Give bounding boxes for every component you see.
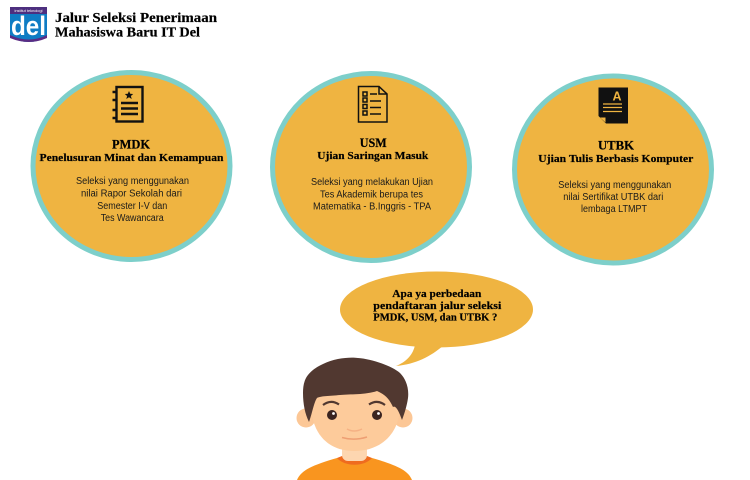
- heading: UTBK: UTBK: [598, 138, 634, 152]
- text: question: pendaftaran jalur seleksi: [373, 300, 501, 312]
- heading: PMDK: PMDK: [112, 138, 150, 152]
- text: UTBK description: lembaga LTMPT: [581, 204, 647, 215]
- subheading: PMDK: Penelusuran Minat dan Kemampuan: [40, 152, 223, 164]
- text: USM description: Tes Akademik berupa tes: [320, 190, 423, 200]
- subheading: USM: Ujian Saringan Masuk: [317, 150, 429, 162]
- panel: PMDK: [33, 72, 230, 260]
- logo: del: del: [11, 11, 46, 41]
- heading: USM: USM: [360, 136, 387, 150]
- speech bubble: [340, 272, 533, 366]
- icon: answer sheet: [598, 88, 628, 124]
- text: PMDK description: Semester I-V dan: [97, 201, 167, 212]
- title: Mahasiswa Baru IT Del: [55, 24, 200, 40]
- text: PMDK description: Seleksi yang menggunakan: [76, 176, 189, 187]
- text: question: [373, 288, 501, 324]
- text: UTBK description: nilai Sertifikat UTBK dari: [563, 192, 663, 203]
- title: [55, 10, 218, 40]
- panel: UTBK: [514, 76, 712, 263]
- icon: notebook with star: [112, 87, 142, 122]
- character: boy: [296, 358, 412, 480]
- text: PMDK description: nilai Rapor Sekolah dari: [81, 188, 182, 200]
- text: UTBK description: [558, 180, 671, 215]
- subheading: UTBK: Ujian Tulis Berbasis Komputer: [538, 153, 693, 165]
- title: Jalur Seleksi Penerimaan: [55, 10, 218, 25]
- text: question: Apa ya perbedaan: [392, 288, 481, 300]
- text: USM description: Matematika - B.Inggris - TPA: [313, 202, 431, 212]
- text: UTBK description: Seleksi yang menggunakan: [558, 180, 671, 191]
- text: PMDK description: Tes Wawancara: [101, 213, 164, 224]
- text: USM description: [311, 177, 433, 212]
- logo: del: institut teknologi: [14, 8, 43, 13]
- icon: checklist document: [358, 86, 387, 122]
- icon: answer sheet: A: [612, 90, 622, 104]
- text: question: PMDK, USM, dan UTBK ?: [373, 312, 497, 324]
- panel: USM: [272, 74, 470, 260]
- text: USM description: Seleksi yang melakukan Ujian: [311, 177, 433, 188]
- text: PMDK description: [76, 176, 189, 224]
